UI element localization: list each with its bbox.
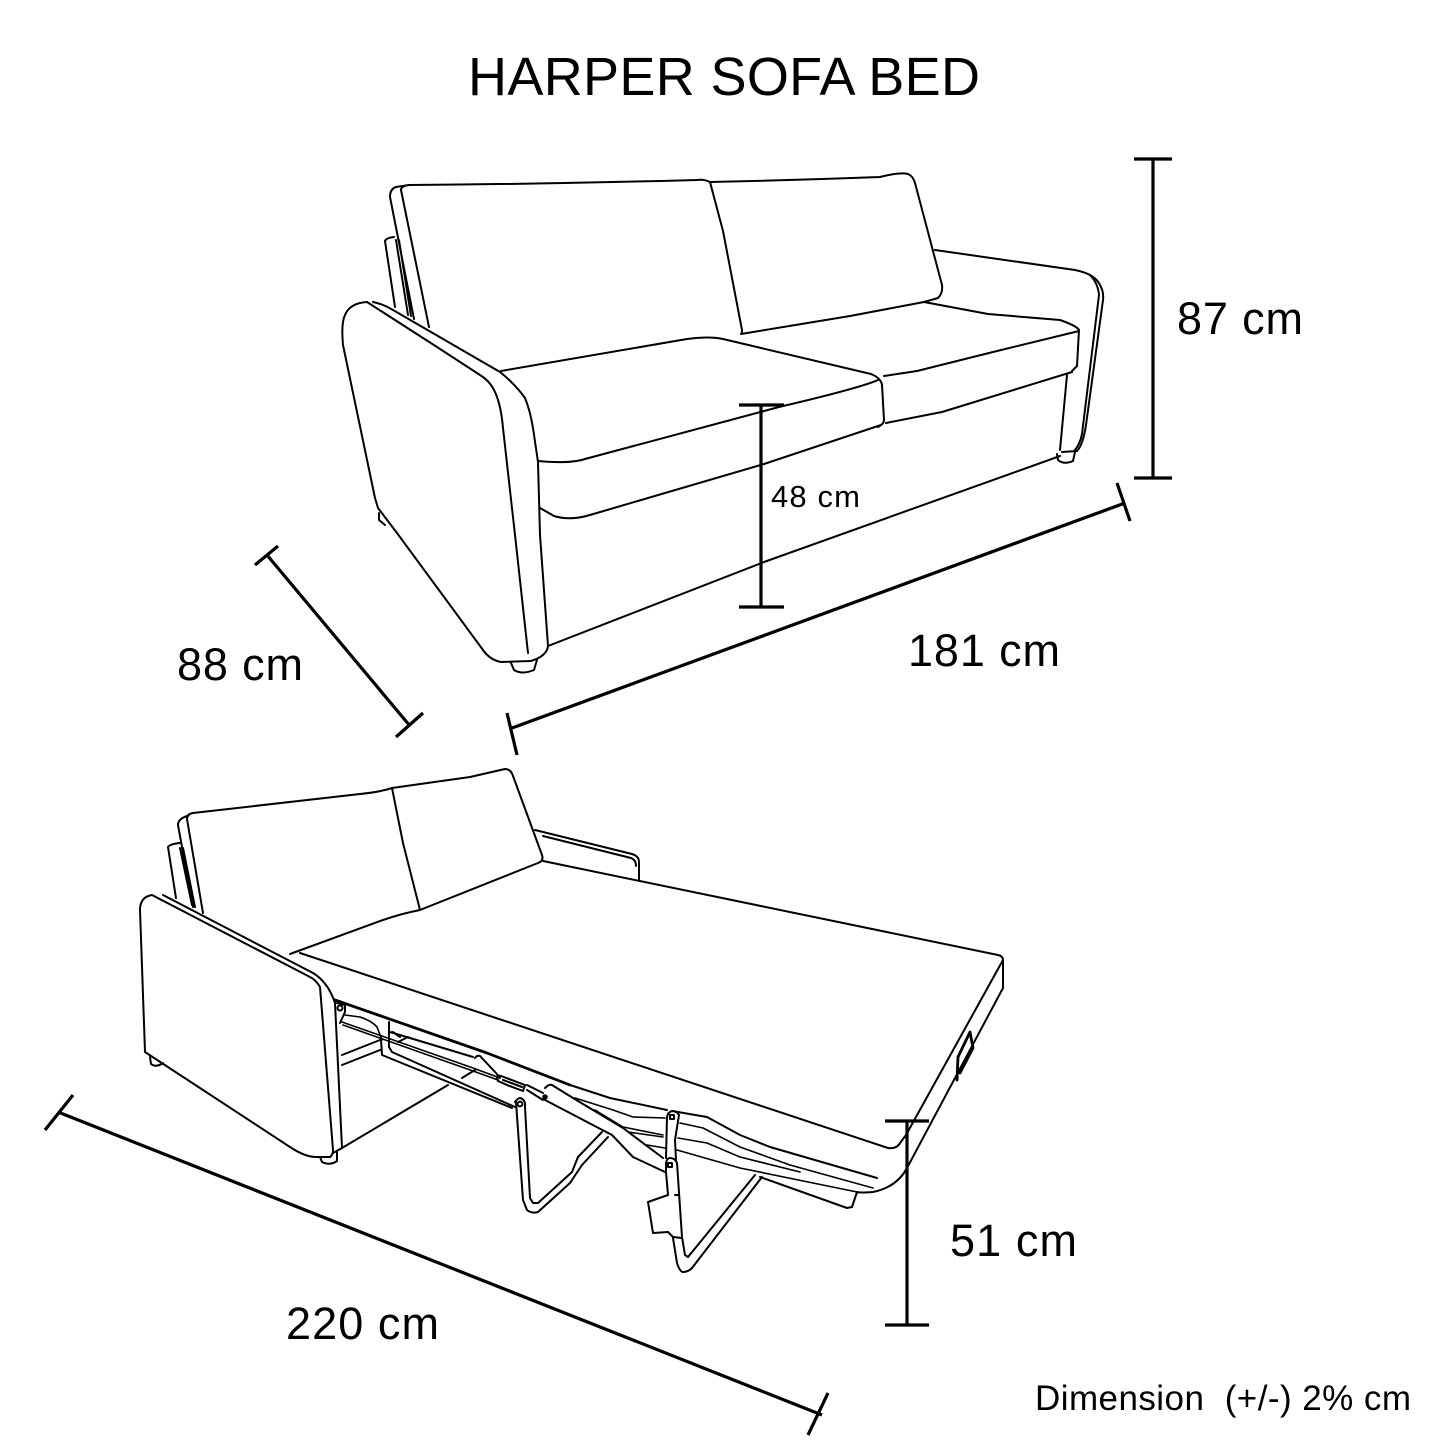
feet [379,513,537,672]
dimension: 181 cm [507,483,1130,755]
back cushions [187,769,542,954]
dimension: 48 cm [739,405,860,607]
leg two [666,1111,762,1272]
dimension: 87 cm [1134,159,1303,478]
floor line [342,1085,448,1148]
mechanism brackets [475,1056,543,1100]
rear leg end [760,1177,857,1208]
dimension: 48 cm: 48 cm [771,479,860,514]
mattress handle [957,1032,973,1080]
leg one [515,1098,608,1213]
dimension: 51 cm: 51 cm [950,1215,1077,1266]
tolerance note: Dimension (+/-) 2% cm [1035,1379,1411,1418]
rear frame [168,816,195,907]
arm outer edge [163,895,342,1153]
folding link [545,1085,665,1172]
illustration: sofa bed open [140,769,1003,1272]
left arm panel [342,302,531,662]
rear frame [385,185,414,319]
feet [150,1057,337,1164]
dimension: 88 cm [177,546,423,737]
dimension: 220 cm: 220 cm [286,1298,439,1349]
right seat cushion [884,302,1079,423]
back cushions [401,173,942,334]
dimension: 220 cm [45,1095,828,1435]
left arm outer edge [373,302,548,661]
base line [548,456,1060,646]
right foot [1057,452,1075,463]
dimension: 181 cm: 181 cm [908,625,1060,676]
arm panel [140,895,333,1157]
dimension: 87 cm: 87 cm [1177,293,1303,344]
title: HARPER SOFA BED [468,47,980,107]
dimension: 88 cm: 88 cm [177,639,303,690]
far arm [535,830,639,881]
leg plate [648,1195,682,1238]
mattress [300,861,1003,1192]
illustration: sofa closed [342,173,1103,672]
dimension: 51 cm [885,1121,1077,1325]
mechanism rails [335,1000,570,1085]
slats [575,1098,873,1192]
left seat cushion [501,338,884,518]
right arm [935,250,1103,452]
